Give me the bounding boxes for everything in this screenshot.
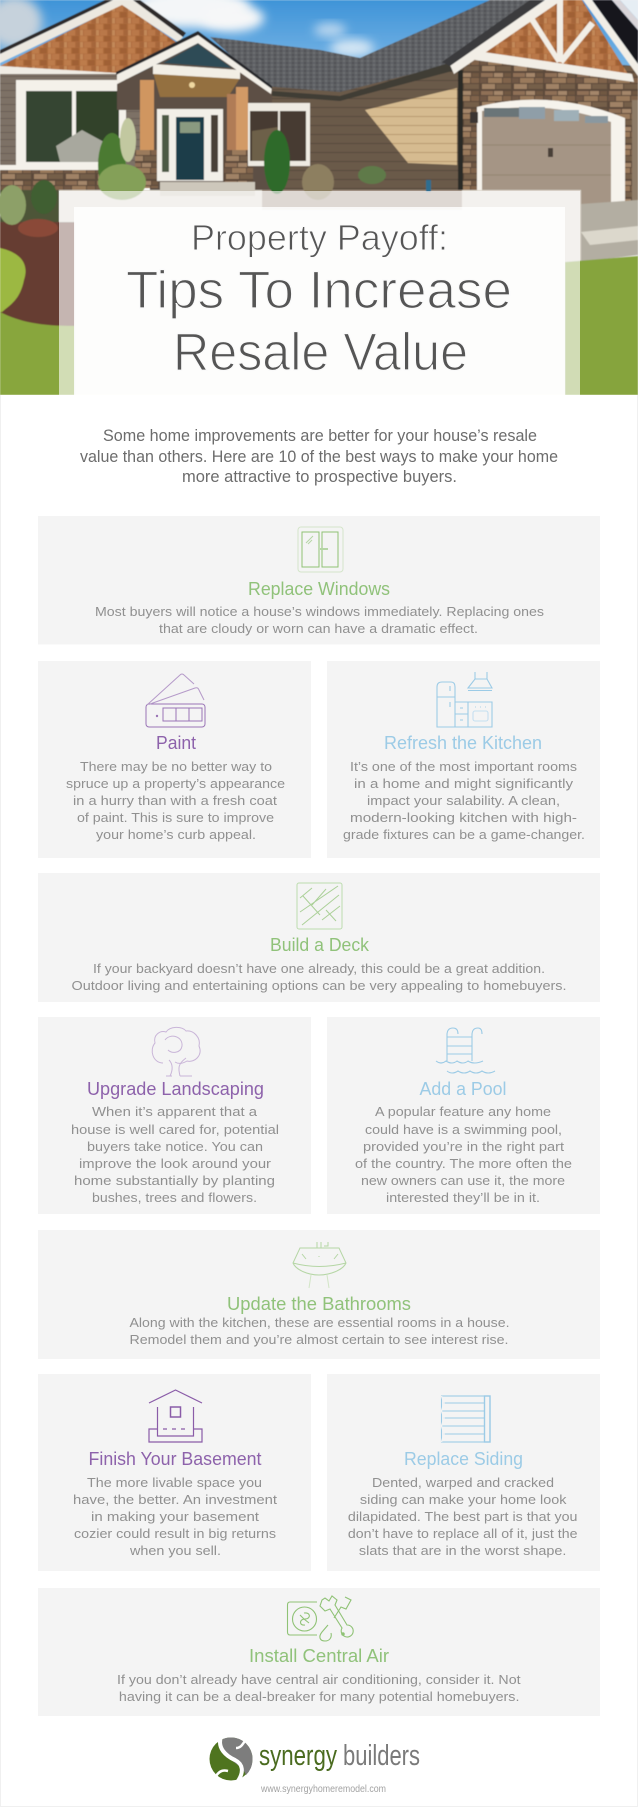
wordmark: synergy: [259, 1740, 337, 1772]
body text: Remodel them and you’re almost certain to see interest rise.: [130, 1332, 508, 1347]
heading: Paint: [156, 733, 196, 753]
heading: Add a Pool: [420, 1079, 506, 1099]
right porch window: [248, 103, 310, 166]
porch gable, ceiling and wall: [116, 31, 272, 192]
body text: when you sell.: [129, 1543, 221, 1558]
heading: Install Central Air: [249, 1646, 389, 1666]
body text: home substantially by planting: [74, 1173, 275, 1188]
intro text: value than others. Here are 10 of the best ways to make your home: [80, 448, 558, 466]
body text: don’t have to replace all of it, just the: [348, 1526, 577, 1541]
icon: pedestal sink: [293, 1242, 346, 1288]
body text: house is well cared for, potential: [71, 1122, 279, 1137]
left gable with shingles: [0, 0, 186, 81]
title: Tips To Increase: [126, 261, 512, 320]
panel: update the bathrooms: [38, 1230, 600, 1359]
main roof: [210, 0, 540, 98]
panel: replace siding: [327, 1374, 600, 1571]
body text: [72, 961, 566, 993]
panel: install central air: [38, 1588, 600, 1716]
panel: add a pool: [327, 1017, 600, 1214]
body text: of the country. The more often the: [355, 1156, 572, 1171]
heading: Finish Your Basement: [88, 1449, 262, 1469]
body text: [66, 759, 285, 842]
body text: could have is a swimming pool,: [365, 1122, 562, 1137]
body text: improve the look around your: [79, 1156, 272, 1171]
logo mark: [210, 1737, 253, 1781]
logo: synergy builders: [210, 1737, 420, 1781]
body text: grade fixtures can be a game-changer.: [343, 827, 585, 842]
body text: [117, 1672, 521, 1704]
wordmark: builders: [343, 1740, 420, 1772]
body text: of paint. This is sure to improve: [77, 810, 274, 825]
title: [126, 217, 512, 382]
icon: air unit and tools: [288, 1596, 353, 1641]
porch columns and stone bases: [135, 80, 253, 190]
panel: build a deck: [38, 873, 600, 1002]
body text: It’s one of the most important rooms: [350, 759, 578, 774]
body text: have, the better. An investment: [73, 1492, 277, 1507]
body text: If you don’t already have central air conditioning, consider it. Not: [117, 1672, 521, 1687]
body text: spruce up a property’s appearance: [66, 776, 285, 791]
body text: impact your salability. A clean,: [367, 793, 560, 808]
body text: in making your basement: [91, 1509, 259, 1524]
sky with clouds: [0, 0, 638, 66]
body text: [348, 1475, 577, 1558]
icon: tree: [152, 1027, 200, 1076]
panel: replace windows: [38, 516, 600, 644]
body text: [355, 1104, 572, 1205]
icon: paint swatches: [146, 674, 205, 727]
sunlit and shaded siding wall: [262, 62, 466, 192]
body text: interested they’ll be in it.: [386, 1190, 540, 1205]
title overlay: outer translucent band: [59, 191, 580, 395]
heading: Refresh the Kitchen: [384, 733, 542, 753]
panel: upgrade landscaping: [38, 1017, 311, 1214]
wordmark: [259, 1740, 420, 1772]
body text: buyers take notice. You can: [87, 1139, 263, 1154]
panel: paint: [38, 661, 311, 858]
body text: A popular feature any home: [375, 1104, 551, 1119]
body text: Outdoor living and entertaining options can be very appealing to homebuyers.: [72, 978, 566, 993]
body text: [73, 1475, 277, 1558]
body text: in a hurry than with a fresh coat: [73, 793, 277, 808]
body text: [71, 1104, 279, 1205]
left wall and window: [0, 74, 150, 192]
body text: slats that are in the worst shape.: [359, 1543, 566, 1558]
title: Property Payoff:: [191, 217, 448, 258]
panel: finish your basement: [38, 1374, 311, 1571]
body text: bushes, trees and flowers.: [92, 1190, 257, 1205]
icon: kitchen: [437, 672, 492, 727]
heading: Update the Bathrooms: [227, 1294, 411, 1314]
body text: siding can make your home look: [360, 1492, 567, 1507]
intro text: more attractive to prospective buyers.: [182, 468, 457, 486]
title overlay: inner translucent panel: [74, 207, 565, 395]
icon: house with basement: [149, 1390, 202, 1442]
heading: Replace Windows: [248, 579, 390, 599]
ground: lawn, mulch, driveway and plants: [0, 118, 638, 395]
body text: [343, 759, 585, 842]
body text: If your backyard doesn’t have one already, this could be a great addition.: [93, 961, 545, 976]
website url: www.synergyhomeremodel.com: [260, 1784, 386, 1795]
panel: refresh the kitchen: [327, 661, 600, 858]
icon: window: [298, 527, 343, 572]
body text: [130, 1315, 509, 1347]
body text: provided you’re in the right part: [363, 1139, 564, 1154]
heading: Upgrade Landscaping: [87, 1079, 264, 1099]
hero photo: house exterior: [0, 0, 638, 395]
icon: siding slats: [442, 1396, 490, 1442]
body text: having it can be a deal-breaker for many potential homebuyers.: [119, 1689, 519, 1704]
body text: cozier could result in big returns: [74, 1526, 277, 1541]
title: Resale Value: [173, 323, 468, 382]
icon: pool ladder: [436, 1028, 495, 1073]
body text: When it’s apparent that a: [92, 1104, 258, 1119]
icon: deck boards: [297, 883, 342, 929]
body text: in a home and might significantly: [354, 776, 574, 791]
body text: Dented, warped and cracked: [372, 1475, 554, 1490]
body text: Along with the kitchen, these are essential rooms in a house.: [130, 1315, 509, 1330]
intro text: [80, 427, 558, 486]
stone garage wall: [463, 55, 638, 205]
heading: Build a Deck: [270, 935, 370, 955]
body text: new owners can use it, the more: [361, 1173, 565, 1188]
body text: Most buyers will notice a house’s windows immediately. Replacing ones: [95, 604, 545, 619]
body text: [95, 604, 545, 636]
body text: There may be no better way to: [80, 759, 272, 774]
body text: dilapidated. The best part is that you: [348, 1509, 577, 1524]
body text: that are cloudy or worn can have a dramatic effect.: [159, 621, 478, 636]
heading: Replace Siding: [404, 1449, 523, 1469]
right gable with braces: [442, 0, 638, 82]
front door with sidelights: [157, 109, 223, 181]
intro text: Some home improvements are better for your house’s resale: [103, 427, 537, 445]
garage door: [470, 100, 625, 205]
body text: modern-looking kitchen with high-: [350, 810, 577, 825]
body text: The more livable space you: [87, 1475, 262, 1490]
body text: your home’s curb appeal.: [96, 827, 256, 842]
